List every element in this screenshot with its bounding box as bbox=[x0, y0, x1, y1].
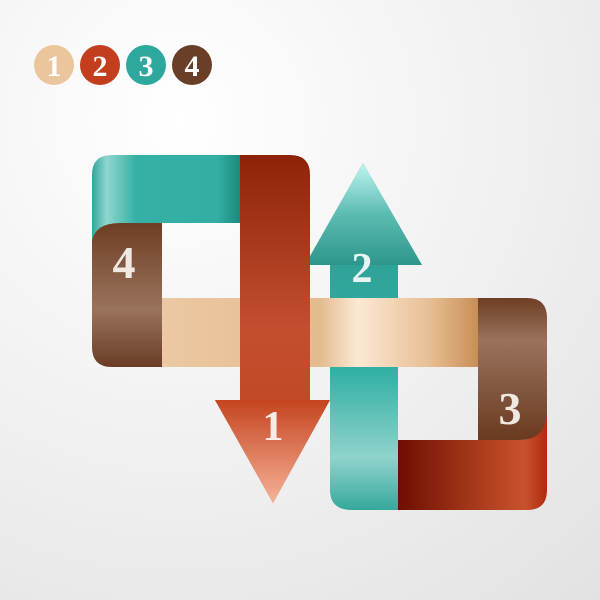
ribbon: brown right with 3: 3 bbox=[498, 383, 522, 434]
ribbon: red down arrow with 1: 1 bbox=[262, 404, 284, 450]
ribbon: red bottom right bbox=[398, 415, 547, 510]
ribbon: brown left with 4 bbox=[92, 223, 162, 367]
ribbon: teal up arrow with 2: 2 bbox=[352, 246, 372, 292]
number legend circles: 3 bbox=[138, 50, 154, 83]
ribbon: tan horizontal band bbox=[162, 298, 478, 367]
number legend circles: 2 bbox=[92, 50, 108, 83]
number legend circles: 4 bbox=[184, 50, 200, 83]
ribbon: red down arrow with 1 bbox=[215, 155, 330, 503]
ribbon: brown left with 4: 4 bbox=[112, 237, 136, 288]
number legend circles: 1 bbox=[46, 50, 62, 83]
number legend circles bbox=[34, 45, 212, 85]
ribbon: teal top left bbox=[92, 155, 240, 240]
ribbon: brown right with 3 bbox=[478, 298, 547, 440]
ribbon: teal up arrow with 2 bbox=[305, 163, 422, 510]
